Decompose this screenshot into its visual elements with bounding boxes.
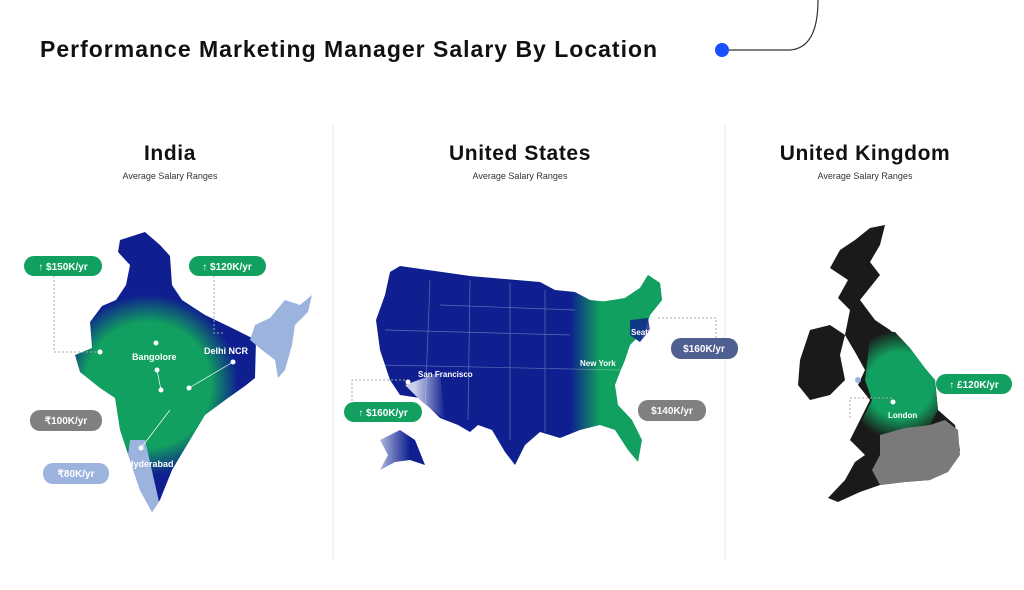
map UK: London xyxy=(888,411,917,420)
title: Performance Marketing Manager Salary By Location xyxy=(40,36,658,62)
badge ₹100K xyxy=(30,410,102,431)
map US: Seattle xyxy=(631,328,658,337)
badge ₹100K: ₹100K/yr xyxy=(45,416,87,427)
map US xyxy=(376,266,675,470)
map India xyxy=(75,232,312,512)
badge $150K: ↑ $150K/yr xyxy=(38,262,88,273)
badge ₹80K: ₹80K/yr xyxy=(58,469,95,480)
map India: Delhi NCR xyxy=(204,346,249,356)
badge $140K: $140K/yr xyxy=(651,406,693,417)
badge $150K xyxy=(24,256,102,276)
badge ₹80K xyxy=(43,463,109,484)
heading UK: United Kingdom xyxy=(780,142,950,165)
map UK xyxy=(798,225,960,502)
map US: Seattle xyxy=(652,313,675,320)
badge £120K: ↑ £120K/yr xyxy=(949,380,999,391)
panel: United Kingdom: Average Salary Ranges xyxy=(818,171,913,181)
map US: San Francisco xyxy=(418,370,473,379)
badge $160K slate: $160K/yr xyxy=(683,344,725,355)
badge $160K slate xyxy=(671,338,738,359)
panel: India xyxy=(24,142,312,520)
badge $160K green: ↑ $160K/yr xyxy=(358,408,408,419)
heading India: India xyxy=(144,142,196,165)
map India: Hyderabad xyxy=(127,459,174,469)
badge $160K green xyxy=(344,402,422,422)
badge £120K xyxy=(936,374,1012,394)
map India: Bangolore xyxy=(132,352,177,362)
badge $120K xyxy=(189,256,266,276)
map US: New York xyxy=(580,359,616,368)
heading US: United States xyxy=(449,142,591,165)
badge $140K xyxy=(638,400,706,421)
badge $120K: ↑ $120K/yr xyxy=(202,262,252,273)
panel: United States xyxy=(344,142,738,470)
decoration: line with dot xyxy=(715,0,818,57)
panel: India: Average Salary Ranges xyxy=(123,171,218,181)
panel: United Kingdom xyxy=(780,142,1012,502)
panel: United States: Average Salary Ranges xyxy=(473,171,568,181)
